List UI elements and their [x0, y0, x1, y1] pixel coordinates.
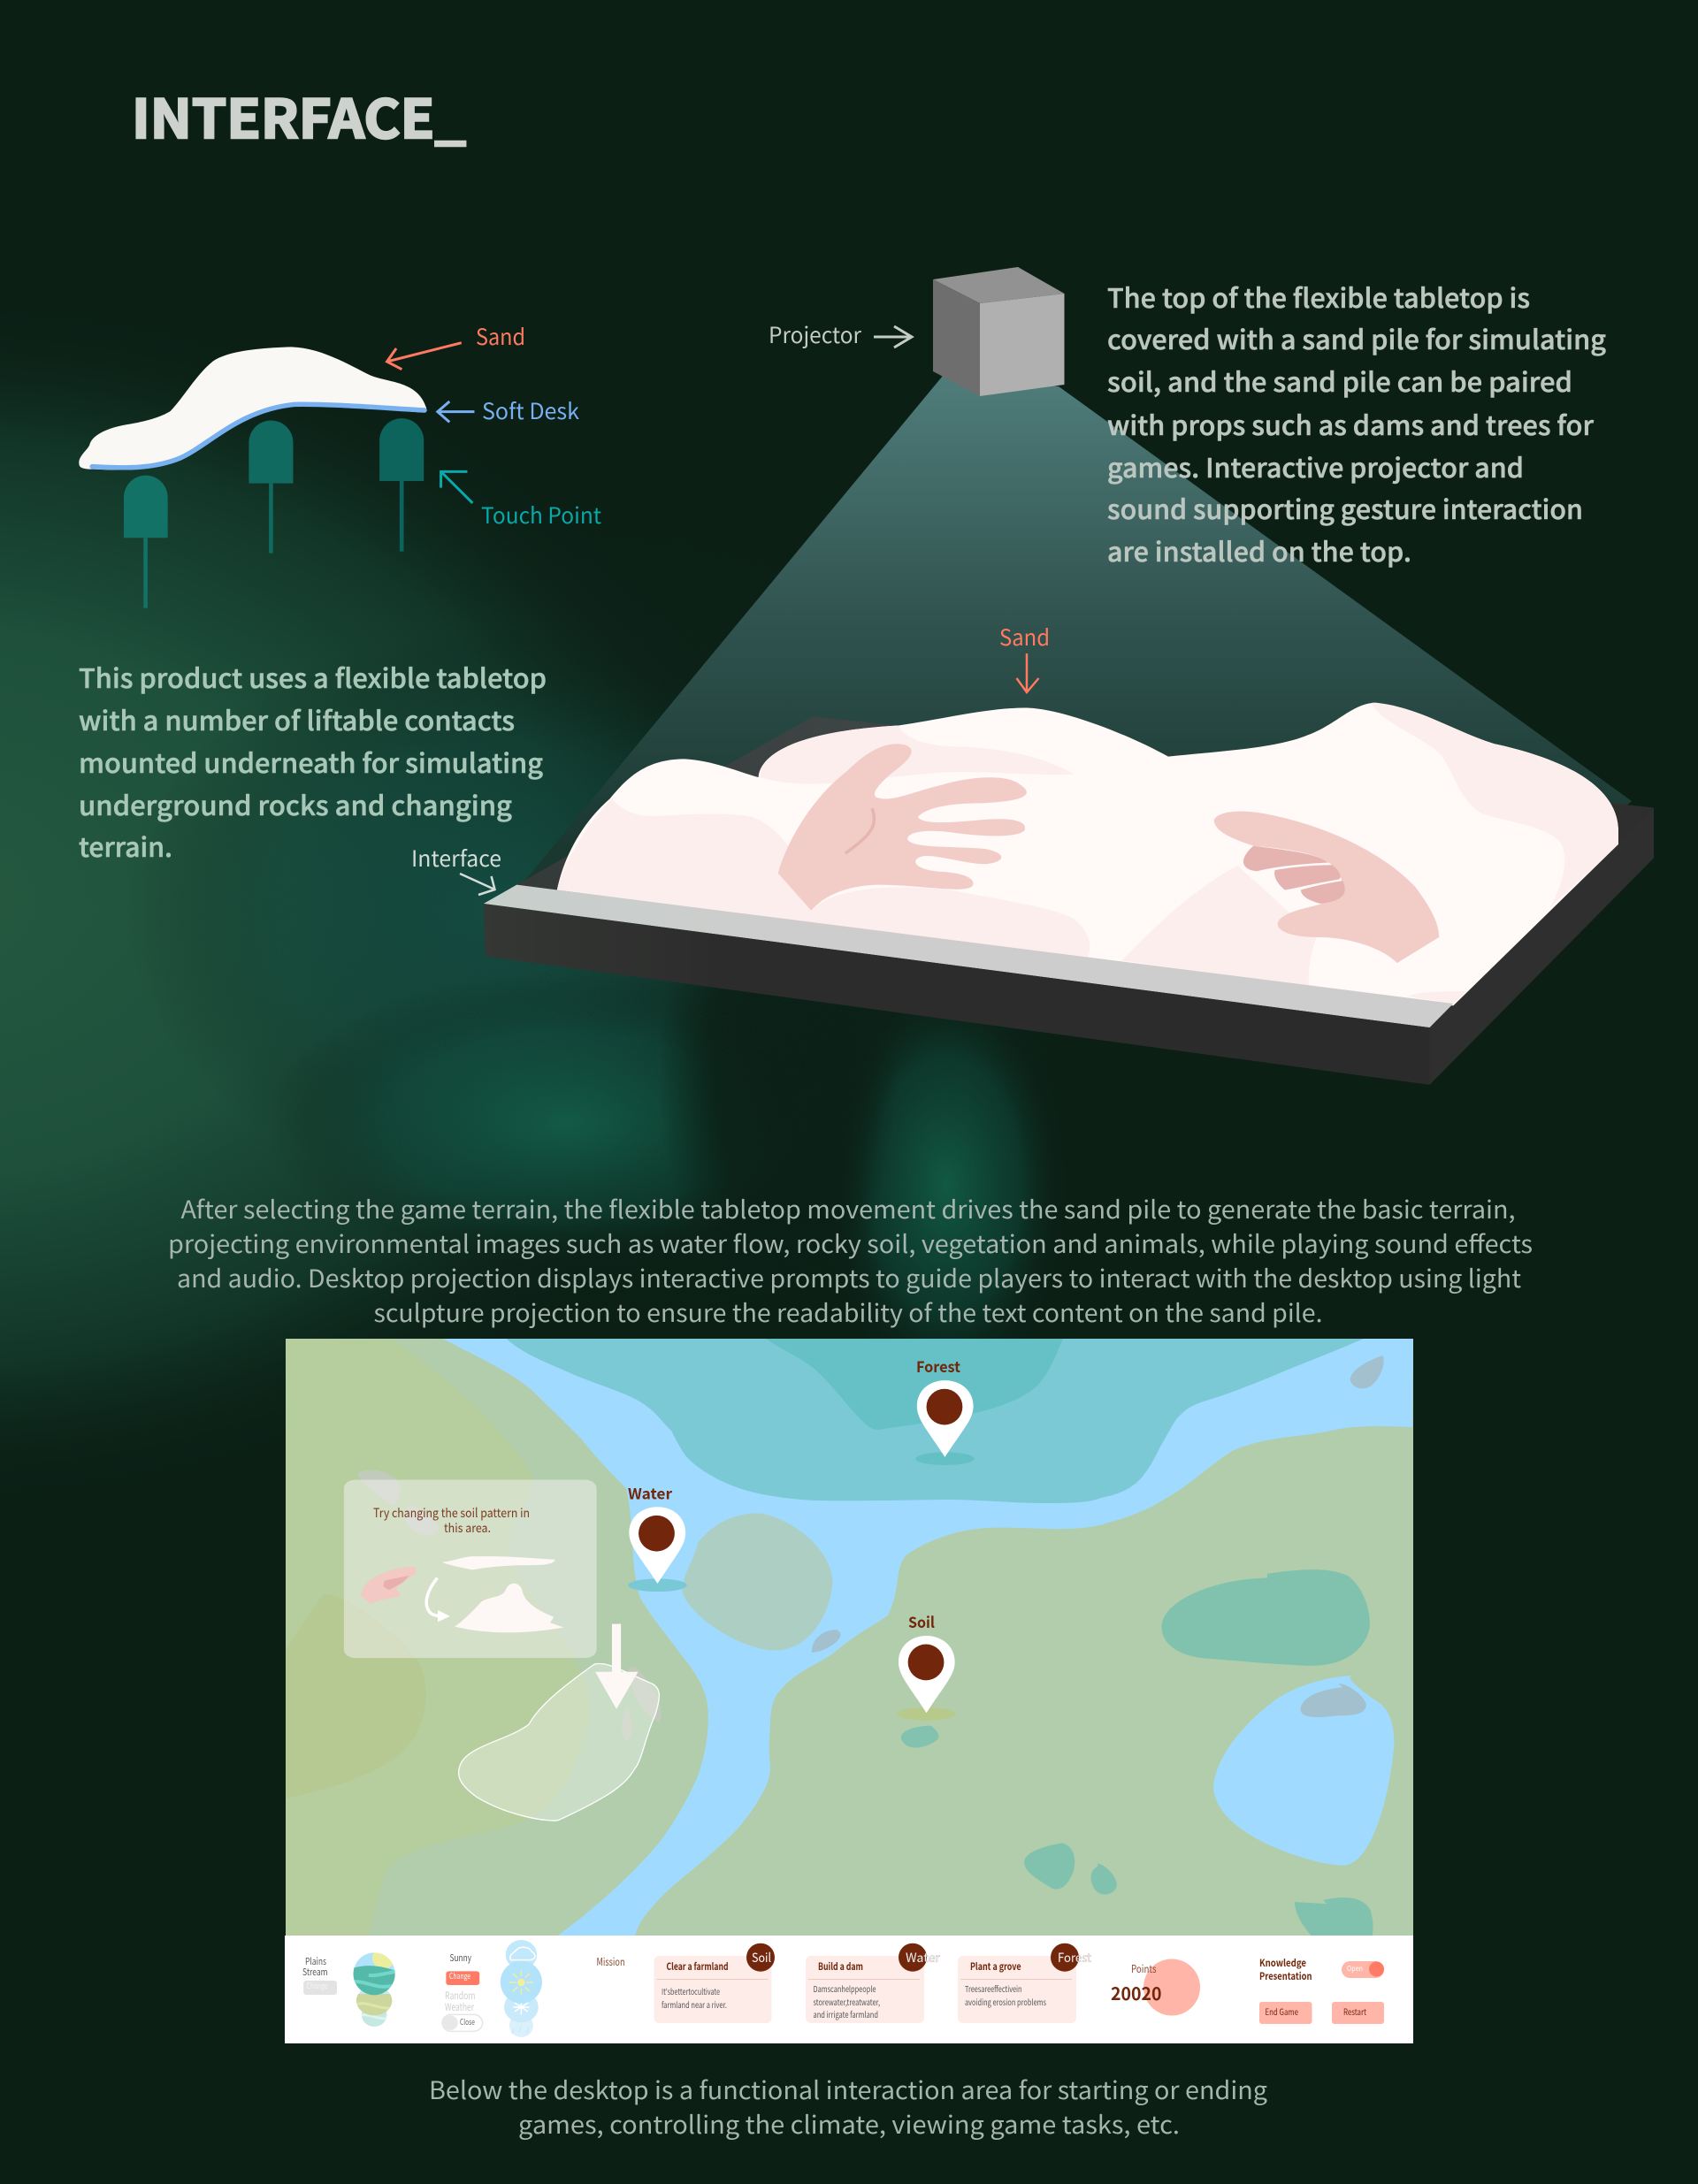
weather change button	[446, 1971, 479, 1985]
green blob	[901, 1726, 938, 1748]
knowledge presentation toggle: Presentation	[1259, 1969, 1312, 1983]
mission card: clear a farmland: It'sbettertocultivate	[662, 1985, 720, 1997]
weather selector: Change	[449, 1970, 470, 1982]
rock on lake	[1301, 1684, 1366, 1717]
text block: terrain explanation: After selecting the game terrain, the flexible tabletop movement drives the sand pile to generate the basic terrain,	[180, 1191, 1516, 1226]
text block: functional area	[429, 2072, 1267, 2142]
dry patch	[283, 1594, 426, 1799]
mission card: clear a farmland: Soil	[752, 1949, 771, 1966]
text block: projector description: soil, and the sand pile can be paired	[1107, 361, 1572, 400]
weather: cloud	[506, 1940, 537, 1969]
rock top right	[1350, 1355, 1384, 1388]
left map details	[283, 1339, 975, 1936]
deep forest zone	[766, 1339, 1063, 1430]
text block: projector description: games. Interactive projector and	[1107, 447, 1524, 485]
mission card: build a dam: and irrigate farmland	[814, 2008, 878, 2020]
mission card: plant a grove: Forest	[1058, 1949, 1092, 1966]
label: projector with arrow	[769, 318, 912, 350]
mission card: build a dam: Water	[906, 1949, 941, 1966]
text block: projector description: are installed on the top.	[1107, 531, 1411, 569]
mission card: build a dam: Damscanhelppeople	[814, 1982, 876, 1995]
mission card: plant a grove: Plant a grove	[970, 1959, 1021, 1974]
text block: flexible tabletop description: underground rocks and changing	[79, 784, 512, 823]
game map	[283, 1339, 1413, 1938]
label: sand: Sand	[476, 320, 525, 352]
points score	[1111, 1959, 1200, 2016]
soft desk line	[92, 404, 424, 468]
weather selector	[442, 1940, 542, 2037]
large terrain thumbnail	[350, 1947, 398, 1998]
terrain selector: Change	[306, 1980, 328, 1991]
weather selector: Weather	[445, 2000, 474, 2014]
points score: Points	[1131, 1961, 1157, 1976]
callout text: this area.	[444, 1519, 491, 1537]
sand shading	[557, 703, 1618, 1004]
island	[683, 1513, 832, 1651]
pin: water	[629, 1507, 685, 1584]
random weather toggle	[442, 2014, 483, 2031]
pin labels: Water	[628, 1482, 673, 1503]
mission card: clear a farmland: Clear a farmland	[667, 1959, 729, 1974]
text block: flexible tabletop description: mounted underneath for simulating	[79, 742, 543, 781]
label: interface with arrow	[411, 842, 501, 895]
mission card: clear a farmland	[654, 1943, 775, 2023]
hint callout	[344, 1480, 597, 1658]
icon: sand pile	[79, 347, 426, 470]
terrain selector: Plains	[305, 1955, 326, 1968]
text block: projector description: with props such as dams and trees for	[1107, 404, 1595, 443]
weather selector: Close	[460, 2016, 475, 2027]
mission card: build a dam	[806, 1943, 941, 2023]
small terrain thumbnail	[359, 2001, 389, 2027]
medium terrain thumbnail	[354, 1983, 394, 2019]
mission card: plant a grove	[958, 1943, 1092, 2023]
sand table illustration	[484, 703, 1654, 1085]
text block: projector description	[1107, 277, 1606, 569]
mission card: build a dam: Build a dam	[818, 1959, 863, 1974]
title: INTERFACE_	[132, 77, 466, 154]
mission card: build a dam: storewater,treatwater,	[814, 1996, 880, 2008]
label: projector with arrow: Projector	[769, 318, 861, 350]
weather selector: Sunny	[449, 1951, 471, 1965]
sand surface	[557, 703, 1618, 1005]
terrain change button	[303, 1981, 337, 1995]
highlighted soil area	[459, 1663, 659, 1821]
weather selector: Random	[445, 1989, 476, 2003]
label: interface with arrow: Interface	[411, 842, 501, 874]
weather: rain	[509, 2013, 533, 2037]
text block: functional area: games, controlling the climate, viewing game tasks, etc.	[518, 2106, 1180, 2142]
hint: curved arrow	[426, 1578, 450, 1622]
text block: flexible tabletop description: with a number of liftable contacts	[79, 699, 515, 738]
touch point 3	[379, 418, 424, 552]
mission card: plant a grove: avoiding erosion problems	[965, 1996, 1046, 2008]
terrain selector: Stream	[302, 1966, 327, 1979]
vegetation patches small	[1024, 1843, 1373, 1937]
projector cube	[933, 267, 1065, 396]
knowledge presentation toggle: Open	[1347, 1964, 1363, 1974]
control panel	[285, 1936, 1413, 2043]
mission card: clear a farmland: farmland near a river.	[662, 1998, 727, 2011]
text block: projector description: sound supporting gesture interaction	[1107, 488, 1583, 527]
hint: sand sketch top	[442, 1556, 555, 1569]
weather: snow	[504, 1992, 539, 2022]
terrain selector	[302, 1947, 398, 2027]
button: restart: Restart	[1343, 2005, 1366, 2018]
weather: sun	[501, 1961, 542, 2004]
callout text	[373, 1504, 530, 1537]
arrow: touch point	[441, 471, 472, 503]
left hand	[778, 744, 1027, 911]
callout text: Try changing the soil pattern in	[373, 1504, 530, 1522]
small rock	[812, 1630, 841, 1653]
button: end game	[1259, 2002, 1312, 2024]
text block: projector description: covered with a sand pile for simulating	[1107, 318, 1606, 357]
pin: soil	[899, 1636, 955, 1713]
lake	[1213, 1676, 1394, 1865]
pin shadow: water	[628, 1578, 687, 1592]
knowledge presentation toggle: Knowledge	[1259, 1956, 1306, 1970]
table light rim	[484, 885, 1453, 1027]
river	[443, 1339, 1413, 1938]
table right side	[1429, 808, 1654, 1085]
arrow: sand	[387, 343, 462, 370]
table tray	[516, 716, 1654, 1027]
mission card: plant a grove: Treesareeffectivein	[965, 1982, 1022, 1995]
text block: flexible tabletop description	[79, 657, 547, 865]
mission heading: Mission	[596, 1954, 624, 1969]
arrow: soft desk	[438, 401, 474, 422]
text block: terrain explanation: projecting environmental images such as water flow, rocky soil, vegetation and animals, while playing sound effects	[168, 1226, 1533, 1261]
background glow	[0, 383, 1041, 1420]
sandy zone	[283, 1339, 589, 1936]
pin shadow: forest	[915, 1452, 975, 1465]
pin: forest	[917, 1380, 974, 1457]
forest zone	[506, 1339, 1364, 1503]
pin shadow: soil	[897, 1707, 956, 1721]
text block: functional area: Below the desktop is a functional interaction area for starting or ending	[429, 2072, 1267, 2107]
gray rocks	[357, 1470, 662, 1740]
pin labels	[628, 1355, 960, 1632]
label: sand with arrow	[999, 621, 1050, 692]
right hand	[1214, 812, 1439, 963]
label: soft desk: Soft Desk	[482, 394, 579, 426]
points score: 20020	[1111, 1980, 1162, 2005]
label: sand with arrow: Sand	[999, 621, 1050, 653]
down arrow	[595, 1624, 639, 1709]
text block: flexible tabletop description: This product uses a flexible tabletop	[79, 657, 547, 696]
vegetation patch large	[1162, 1569, 1370, 1666]
text block: terrain explanation	[168, 1191, 1533, 1330]
label: touch point: Touch Point	[481, 499, 602, 531]
text block: projector description: The top of the flexible tabletop is	[1107, 277, 1530, 316]
text block: flexible tabletop description: terrain.	[79, 826, 172, 865]
text block: terrain explanation: and audio. Desktop projection displays interactive prompts to guide players to interact with the desktop using light	[177, 1260, 1521, 1295]
hint: sand sketch mountain	[455, 1584, 563, 1632]
hint: hand	[361, 1567, 417, 1604]
touch point 1	[124, 476, 168, 608]
knowledge presentation toggle	[1259, 1956, 1384, 1983]
button: restart	[1332, 2002, 1384, 2024]
right map details	[1024, 1355, 1394, 1937]
text block: terrain explanation: sculpture projection to ensure the readability of the text content on the sand pile.	[373, 1294, 1323, 1330]
pin labels: Soil	[908, 1610, 935, 1632]
touch point 2	[249, 420, 293, 554]
projection light beam	[522, 376, 1632, 973]
pin labels: Forest	[916, 1355, 960, 1377]
table front	[484, 904, 1429, 1085]
button: end game: End Game	[1265, 2005, 1298, 2018]
diagram: flexible tabletop cross-section	[79, 320, 602, 608]
